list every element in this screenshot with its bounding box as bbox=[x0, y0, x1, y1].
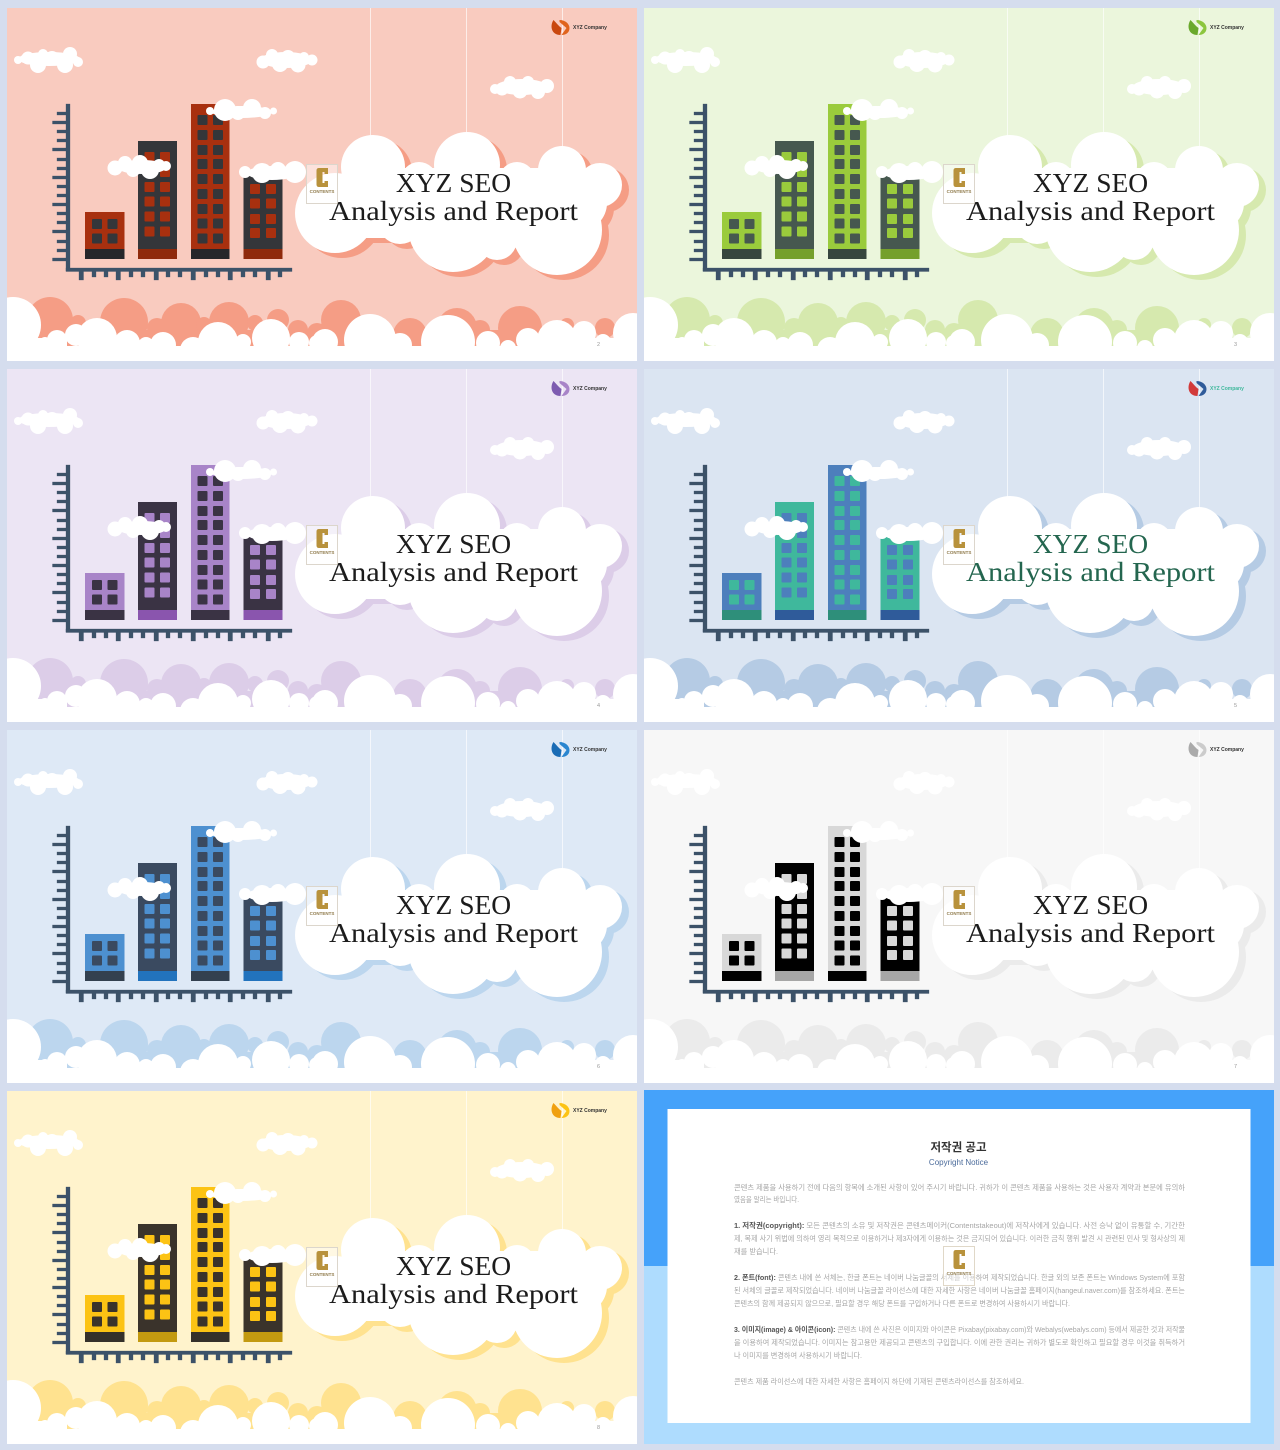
building bar 2 bbox=[138, 141, 177, 259]
white notice panel bbox=[667, 1109, 1250, 1423]
watermark bbox=[943, 886, 974, 926]
chart axes bbox=[52, 1187, 292, 1363]
page number: 5 bbox=[1234, 703, 1237, 709]
page number: 3 bbox=[1234, 342, 1237, 348]
title: XYZ SEO bbox=[396, 167, 511, 198]
slide: coral theme bbox=[7, 8, 637, 361]
building bar 1 bbox=[85, 212, 124, 259]
title: Analysis and Report bbox=[966, 195, 1215, 226]
page number: 2 bbox=[597, 342, 600, 348]
slide: monochrome theme bbox=[644, 730, 1274, 1083]
building bar 4 bbox=[244, 176, 282, 259]
company logo bbox=[552, 381, 607, 396]
section 1 copyright: 1. 저작권(copyright): 모든 콘텐츠의 소유 및 저작권은 콘텐츠메이커(Contentstakeout)에 저작사에게 있습니다. 사전 승낙 없이 유통할 수, 기간한 bbox=[734, 1221, 1185, 1230]
sky clouds bbox=[14, 47, 554, 183]
main title cloud bbox=[295, 132, 629, 280]
light blue bottom band bbox=[644, 1266, 1274, 1444]
hanging strings bbox=[370, 8, 563, 153]
company logo bbox=[1188, 20, 1244, 35]
hanging strings bbox=[370, 730, 563, 875]
building bar 4 bbox=[244, 898, 282, 981]
chart axes bbox=[52, 826, 292, 1002]
title bbox=[966, 167, 1215, 226]
building bar 2 bbox=[138, 502, 177, 620]
watermark bbox=[306, 886, 338, 926]
building bar 1 bbox=[722, 212, 761, 259]
hanging strings bbox=[1006, 730, 1200, 875]
watermark bbox=[943, 526, 974, 564]
slide: purple theme bbox=[7, 369, 637, 722]
building bar 1 bbox=[85, 1295, 124, 1342]
building bar 2 bbox=[138, 1224, 177, 1342]
title bbox=[966, 889, 1215, 948]
building bar 2 bbox=[138, 863, 177, 981]
slide: blue and teal theme bbox=[644, 369, 1274, 722]
watermark: CONTENTS bbox=[310, 189, 334, 194]
title: Analysis and Report bbox=[329, 195, 578, 226]
page number: 6 bbox=[597, 1064, 600, 1070]
chart axes bbox=[52, 104, 292, 280]
section 3 image and icon bbox=[734, 1325, 1185, 1360]
watermark: CONTENTS bbox=[946, 1271, 971, 1276]
company logo: XYZ Company bbox=[1210, 747, 1244, 753]
building bar 4 bbox=[880, 537, 919, 620]
slide background bbox=[644, 8, 1274, 361]
building bar 2 bbox=[774, 141, 814, 259]
intro paragraph: 콘텐츠 제품을 사용하기 전에 다음의 항목에 소개된 사항이 있어 주시기 바랍니다. 귀하가 이 콘텐츠 제품을 사용하는 것은 사용자 계약과 본문에 유의하 bbox=[734, 1183, 1185, 1192]
title: XYZ SEO bbox=[1032, 167, 1148, 198]
title: XYZ SEO bbox=[396, 1250, 511, 1281]
section 2 font: 2. 폰트(font): 콘텐츠 내에 쓴 서체는, 한글 폰트는 네이버 나눔글꼴의 서체를 이용하여 제작되었습니다. 한글 외의 보존 폰트는 Windows System에 포함 bbox=[734, 1273, 1185, 1282]
main title cloud bbox=[295, 1215, 629, 1363]
company logo bbox=[552, 742, 607, 757]
page number: 8 bbox=[597, 1425, 600, 1431]
chart axes bbox=[689, 104, 928, 280]
slide background bbox=[7, 369, 637, 722]
title bbox=[329, 167, 578, 226]
watermark: CONTENTS bbox=[310, 1272, 334, 1277]
title bbox=[329, 1250, 578, 1309]
slide: yellow theme bbox=[7, 1091, 637, 1444]
watermark: CONTENTS bbox=[946, 911, 971, 916]
title: XYZ SEO bbox=[1032, 889, 1148, 920]
intro paragraph: 였음을 알리는 바입니다. bbox=[734, 1195, 798, 1204]
bottom cloud bank bbox=[0, 658, 653, 730]
notice heading: 저작권 공고 bbox=[930, 1140, 986, 1154]
building bar 3 bbox=[191, 104, 230, 259]
watermark: CONTENTS bbox=[310, 911, 334, 916]
slide background bbox=[644, 730, 1274, 1083]
building bar 4 bbox=[244, 1259, 282, 1342]
bottom cloud bank bbox=[622, 1019, 1280, 1091]
page number: 4 bbox=[597, 703, 600, 709]
section 3 image and icon: 나 이미지를 변경하여 사용하시기 바랍니다. bbox=[734, 1351, 862, 1360]
section 1 copyright: 제, 복제 사기 위법에 의하여 영리 목적으로 이용하거나 제3자에게 이용하는 것은 금지되어 있습니다. 이러한 금칙 행위 발견 시 관련된 민사 및 형사상의 제 bbox=[734, 1234, 1184, 1243]
title: XYZ SEO bbox=[396, 528, 511, 559]
sky clouds bbox=[650, 408, 1190, 544]
bottom cloud bank bbox=[622, 658, 1280, 730]
building bar 3 bbox=[191, 826, 230, 981]
sky clouds bbox=[650, 47, 1190, 183]
company logo: XYZ Company bbox=[573, 1108, 607, 1114]
closing line: 콘텐츠 제품 라이선스에 대한 자세한 사항은 홈페이지 하단에 기재된 콘텐츠라이선스를 참조하세요. bbox=[734, 1377, 1024, 1386]
main title cloud bbox=[295, 493, 629, 641]
main title cloud bbox=[295, 854, 629, 1002]
watermark: CONTENTS bbox=[946, 189, 971, 194]
bottom cloud bank bbox=[622, 297, 1280, 369]
building bar 3 bbox=[828, 465, 866, 620]
company logo bbox=[1188, 742, 1244, 757]
chart axes bbox=[689, 826, 928, 1002]
title: XYZ SEO bbox=[1032, 528, 1148, 559]
title: Analysis and Report bbox=[329, 556, 578, 587]
intro paragraph bbox=[734, 1183, 1185, 1204]
sky clouds bbox=[14, 408, 554, 544]
title bbox=[966, 528, 1215, 587]
building bar 3 bbox=[191, 465, 230, 620]
notice subheading: Copyright Notice bbox=[928, 1158, 988, 1167]
company logo: XYZ Company bbox=[1210, 386, 1244, 392]
company logo bbox=[552, 20, 607, 35]
building bar 3 bbox=[828, 104, 866, 259]
building bar 3 bbox=[828, 826, 866, 981]
main title cloud bbox=[932, 854, 1266, 1002]
sky clouds bbox=[650, 769, 1190, 905]
blue top band bbox=[644, 1090, 1274, 1266]
slide: copyright notice bbox=[644, 1090, 1274, 1444]
hanging strings bbox=[1006, 369, 1200, 514]
slide background bbox=[7, 730, 637, 1083]
company logo: XYZ Company bbox=[573, 25, 607, 31]
bottom cloud bank bbox=[0, 297, 653, 369]
slide background bbox=[7, 1091, 637, 1444]
title: Analysis and Report bbox=[966, 556, 1215, 587]
slide background bbox=[644, 369, 1274, 722]
building bar 4 bbox=[244, 537, 282, 620]
company logo: XYZ Company bbox=[573, 386, 607, 392]
chart axes bbox=[689, 465, 928, 641]
title: Analysis and Report bbox=[966, 917, 1215, 948]
building bar 1 bbox=[722, 573, 761, 620]
company logo: XYZ Company bbox=[573, 747, 607, 753]
building bar 2 bbox=[774, 863, 814, 981]
slide: sky blue theme bbox=[7, 730, 637, 1083]
section 1 copyright: 재를 받습니다. bbox=[734, 1247, 778, 1256]
section 3 image and icon: 을 이용하여 제작되었습니다. 이미지는 참고용만 제공되고 콘텐츠의 구입합니다. 이에 관한 권리는 귀하가 별도로 확인하고 필요할 경우 이것을 취득하거 bbox=[734, 1338, 1184, 1347]
building bar 3 bbox=[191, 1187, 230, 1342]
hanging strings bbox=[1006, 8, 1200, 153]
building bar 1 bbox=[85, 573, 124, 620]
watermark bbox=[943, 164, 974, 204]
section 3 image and icon: 3. 이미지(image) & 아이콘(icon): 콘텐츠 내에 쓴 사진은 이미지와 아이콘은 Pixabay(pixabay.com)와 Webalys(webalys.com) 등에서 제공한 것과 저작물 bbox=[734, 1325, 1185, 1334]
building bar 4 bbox=[880, 898, 919, 981]
title bbox=[329, 889, 578, 948]
slide: green theme bbox=[644, 8, 1274, 361]
section 2 font bbox=[734, 1273, 1185, 1308]
building bar 2 bbox=[774, 502, 814, 620]
watermark bbox=[306, 164, 338, 204]
company logo bbox=[1188, 381, 1244, 396]
slide background bbox=[7, 8, 637, 361]
title: Analysis and Report bbox=[329, 917, 578, 948]
company logo bbox=[552, 1103, 607, 1118]
watermark bbox=[943, 1246, 974, 1286]
hanging strings bbox=[370, 369, 563, 514]
company logo: XYZ Company bbox=[1210, 25, 1244, 31]
main title cloud bbox=[932, 132, 1266, 280]
sky clouds bbox=[14, 769, 554, 905]
chart axes bbox=[52, 465, 292, 641]
page number: 7 bbox=[1234, 1064, 1237, 1070]
building bar 1 bbox=[85, 934, 124, 981]
title: XYZ SEO bbox=[396, 889, 511, 920]
building bar 1 bbox=[722, 934, 761, 981]
sky clouds bbox=[14, 1130, 554, 1266]
bottom cloud bank bbox=[0, 1019, 653, 1091]
main title cloud bbox=[932, 493, 1266, 641]
title bbox=[329, 528, 578, 587]
title: Analysis and Report bbox=[329, 1278, 578, 1309]
section 1 copyright bbox=[734, 1221, 1185, 1256]
section 2 font: 콘텐츠의 함께 제공되지 않으므로, 필요할 경우 해당 폰트를 구입하거나 다른 폰트로 변경하여 사용하시기 바랍니다. bbox=[734, 1299, 1070, 1308]
watermark: CONTENTS bbox=[310, 550, 334, 555]
watermark: CONTENTS bbox=[946, 550, 971, 555]
building bar 4 bbox=[880, 176, 919, 259]
watermark bbox=[306, 526, 338, 564]
section 2 font: 된 서체의 글꼴로 제작되었습니다. 네이버 나눔글꼴 라이선스에 대한 자세한 사항은 네이버 나눔글꼴 홈페이지(hangeul.naver.com)를 참조하세요. 폰트는 bbox=[734, 1286, 1185, 1295]
hanging strings bbox=[370, 1091, 563, 1236]
watermark bbox=[306, 1248, 338, 1286]
bottom cloud bank bbox=[0, 1380, 653, 1450]
